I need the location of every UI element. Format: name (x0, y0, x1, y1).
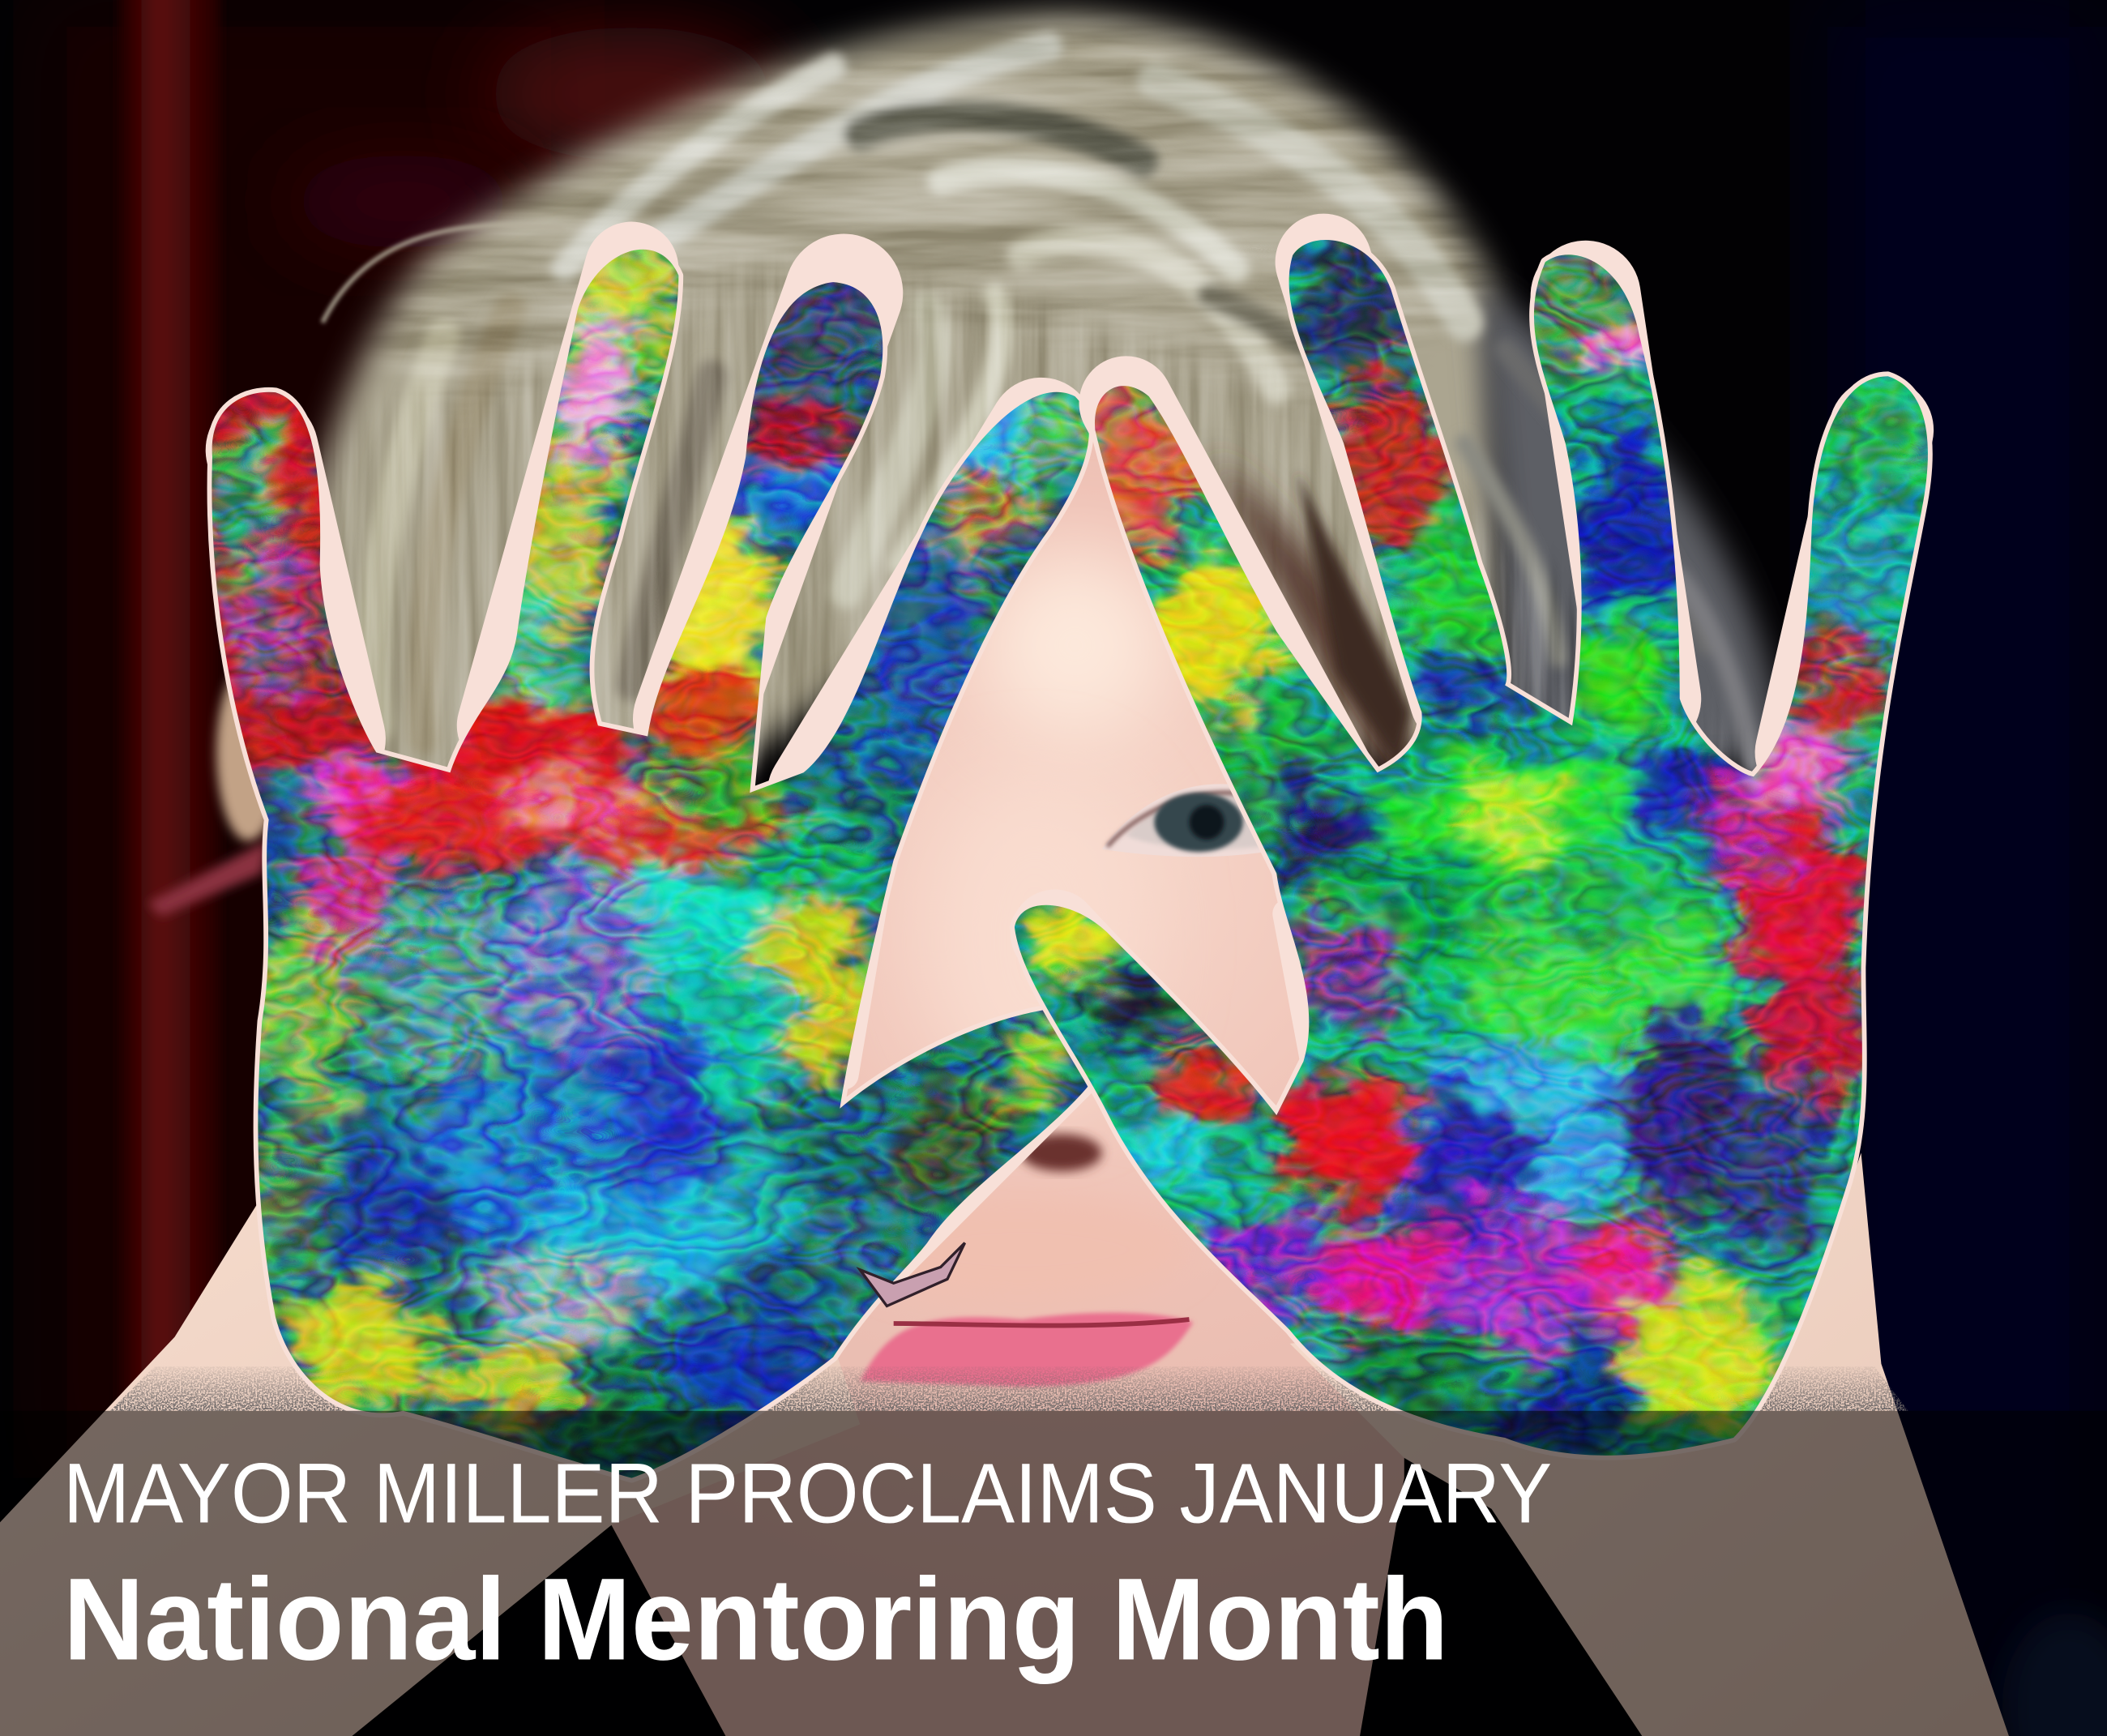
title line 2: National Mentoring Month (63, 1554, 1448, 1684)
title line 1: MAYOR MILLER PROCLAIMS JANUARY (63, 1446, 1552, 1541)
arms (0, 1152, 2009, 1736)
nose shadow (1021, 1134, 1102, 1172)
hair strands (374, 47, 1754, 766)
left hand marbling (212, 250, 1089, 1478)
left hand skin (212, 250, 1108, 1478)
ear (216, 664, 281, 841)
hair wisp (323, 225, 564, 323)
right hand marbling (1008, 215, 1948, 1478)
left hand paint (212, 250, 1089, 1478)
ring on left thumb (860, 1243, 965, 1306)
sleeve glow (147, 840, 269, 917)
noise fade band (110, 1366, 1908, 1411)
right hand (1008, 215, 1948, 1478)
face (611, 417, 1413, 1736)
lips (860, 1313, 1193, 1387)
hair (311, 0, 1780, 786)
right hand skin (1015, 240, 1928, 1456)
left hand (188, 215, 1129, 1505)
hair texture (337, 269, 1741, 783)
eye (1102, 784, 1266, 857)
chin shading (853, 1196, 1189, 1303)
right hand paint (1008, 215, 1948, 1478)
translucent caption band (0, 1411, 2107, 1736)
